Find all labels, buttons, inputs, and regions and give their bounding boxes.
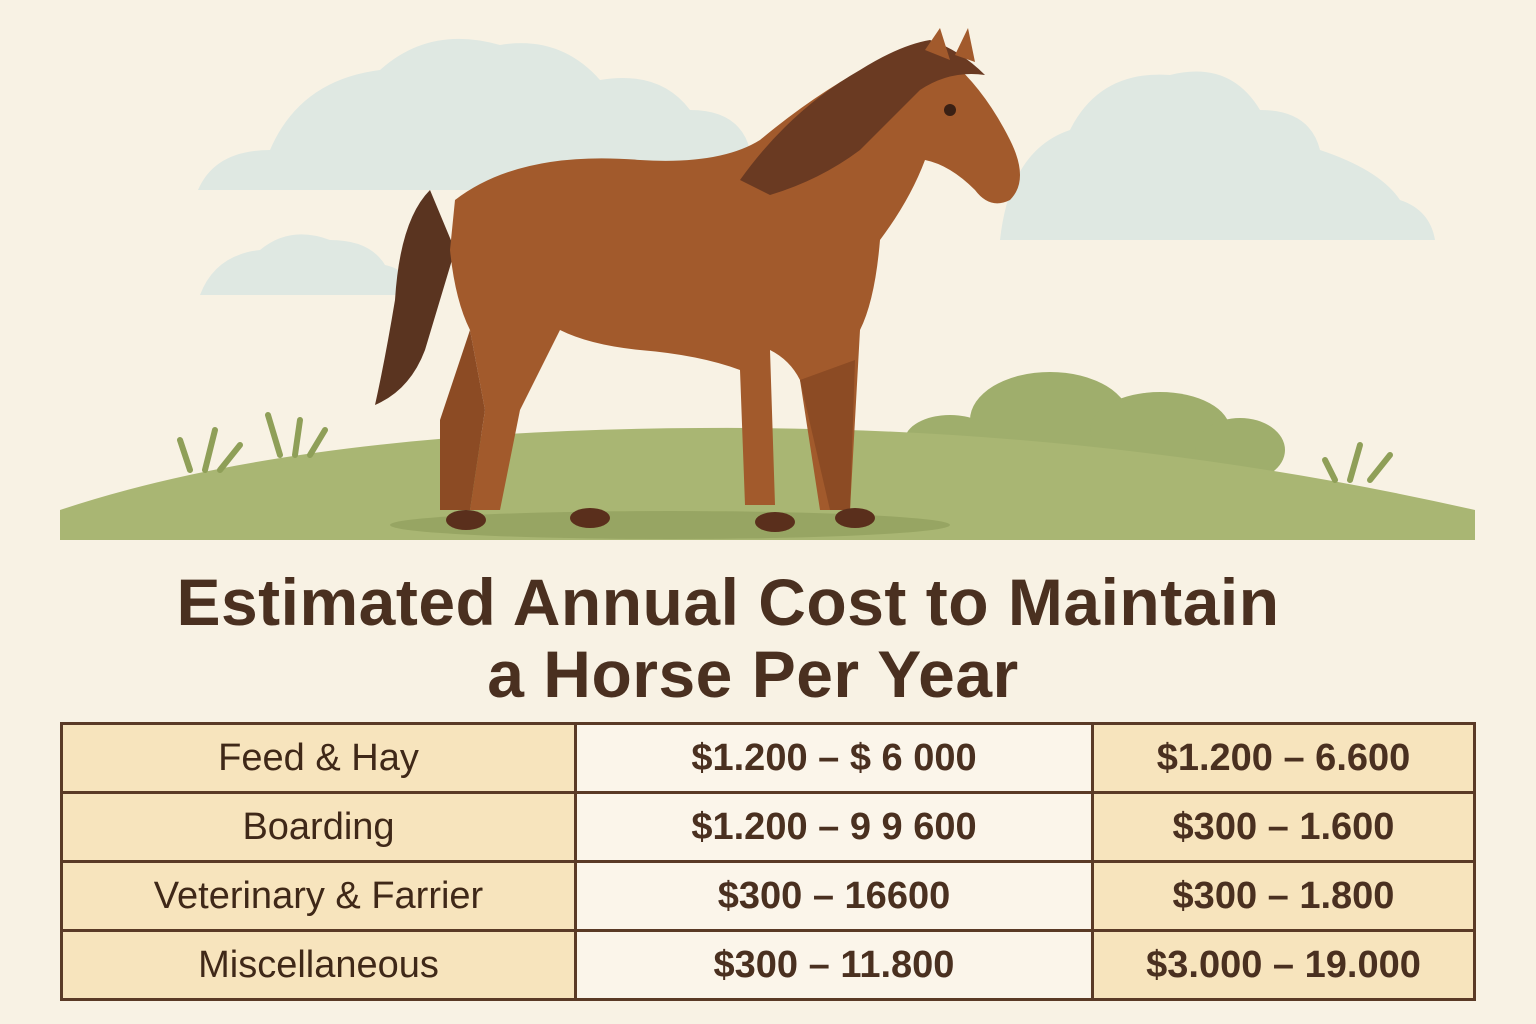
title: Estimated Annual Cost to Maintain [176, 565, 1280, 639]
cost table: $3.000 – 19.000 [1146, 944, 1421, 986]
cost table: $1.200 – 6.600 [1157, 736, 1410, 778]
ground [60, 428, 1475, 540]
title [176, 565, 1280, 711]
cost table [60, 722, 1476, 1001]
grass tufts [180, 415, 1390, 480]
cost table: $300 – 1.600 [1173, 806, 1394, 848]
cost table: $300 – 1.800 [1173, 874, 1394, 916]
cost table: $300 – 11.800 [714, 944, 954, 986]
cost table: $300 – 16600 [718, 874, 950, 916]
cost table: $1.200 – 9 9 600 [691, 806, 977, 848]
bushes [905, 372, 1285, 482]
illustration: horse in meadow [60, 28, 1475, 540]
cost table: Feed & Hay [218, 736, 419, 778]
clouds [198, 39, 1435, 295]
cost table: Miscellaneous [198, 944, 439, 986]
cost table: $1.200 – $ 6 000 [691, 736, 977, 778]
horse [375, 28, 1020, 532]
title: a Horse Per Year [487, 637, 1019, 711]
cost table: Boarding [242, 806, 395, 848]
cost table: Veterinary & Farrier [154, 874, 483, 916]
